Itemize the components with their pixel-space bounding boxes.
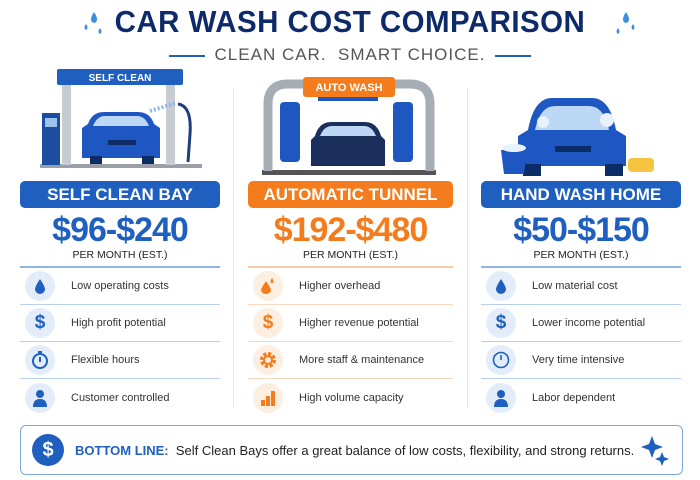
- feature list: Flexible hours: [71, 354, 139, 366]
- feature list: $: [263, 312, 273, 333]
- illustration: automatic tunnel: AUTO WASH: [315, 82, 383, 94]
- feature list: Labor dependent: [532, 392, 615, 404]
- icon: water splash right: [616, 12, 634, 34]
- feature list: Higher revenue potential: [299, 317, 419, 329]
- per month: PER MONTH (EST.): [533, 249, 629, 261]
- header pill: [248, 181, 453, 208]
- illustration: automatic tunnel: [262, 77, 436, 175]
- feature list: Lower income potential: [532, 317, 645, 329]
- panel: hand wash home: [481, 181, 681, 413]
- price: $96-$240: [52, 211, 188, 249]
- icon: dollar circle: $: [42, 439, 54, 461]
- price: $50-$150: [513, 211, 649, 249]
- feature list: More staff & maintenance: [299, 354, 424, 366]
- feature list: Higher overhead: [299, 280, 380, 292]
- feature list: [248, 271, 453, 413]
- illustration: self clean bay: SELF CLEAN: [89, 73, 151, 84]
- price: $192-$480: [274, 211, 427, 249]
- feature list: Low material cost: [532, 280, 618, 292]
- bottom line text: BOTTOM LINE: Self Clean Bays offer a great balance of low costs, flexibility, and strong returns.: [75, 442, 634, 458]
- illustration: hand wash: [501, 98, 654, 176]
- column dividers: [233, 88, 234, 408]
- feature list: $: [35, 312, 45, 333]
- per month: PER MONTH (EST.): [303, 249, 398, 261]
- feature list: Low operating costs: [71, 280, 169, 292]
- feature list: $: [496, 312, 506, 333]
- title: CAR WASH COST COMPARISON: [115, 4, 585, 39]
- header pill: AUTOMATIC TUNNEL: [263, 185, 438, 204]
- header pill: SELF CLEAN BAY: [47, 185, 193, 204]
- feature list: Very time intensive: [532, 354, 624, 366]
- per month: PER MONTH (EST.): [72, 249, 168, 261]
- feature list: Customer controlled: [71, 392, 169, 404]
- icon: water splash left: [84, 12, 102, 34]
- icon: sparkles: [641, 436, 669, 466]
- panel: self clean bay: [20, 181, 220, 413]
- illustration: self clean bay: [40, 69, 202, 168]
- feature list: High profit potential: [71, 317, 166, 329]
- callout: bottom line: [20, 425, 683, 475]
- header pill: HAND WASH HOME: [501, 185, 661, 204]
- icon: dollar circle: [32, 434, 64, 466]
- feature list: [20, 271, 220, 413]
- subtitle: CLEAN CAR. SMART CHOICE.: [215, 45, 485, 64]
- feature list: High volume capacity: [299, 392, 404, 404]
- header pill: [20, 181, 220, 208]
- header pill: [481, 181, 681, 208]
- panel: automatic tunnel: [248, 181, 453, 413]
- feature list: [481, 271, 681, 413]
